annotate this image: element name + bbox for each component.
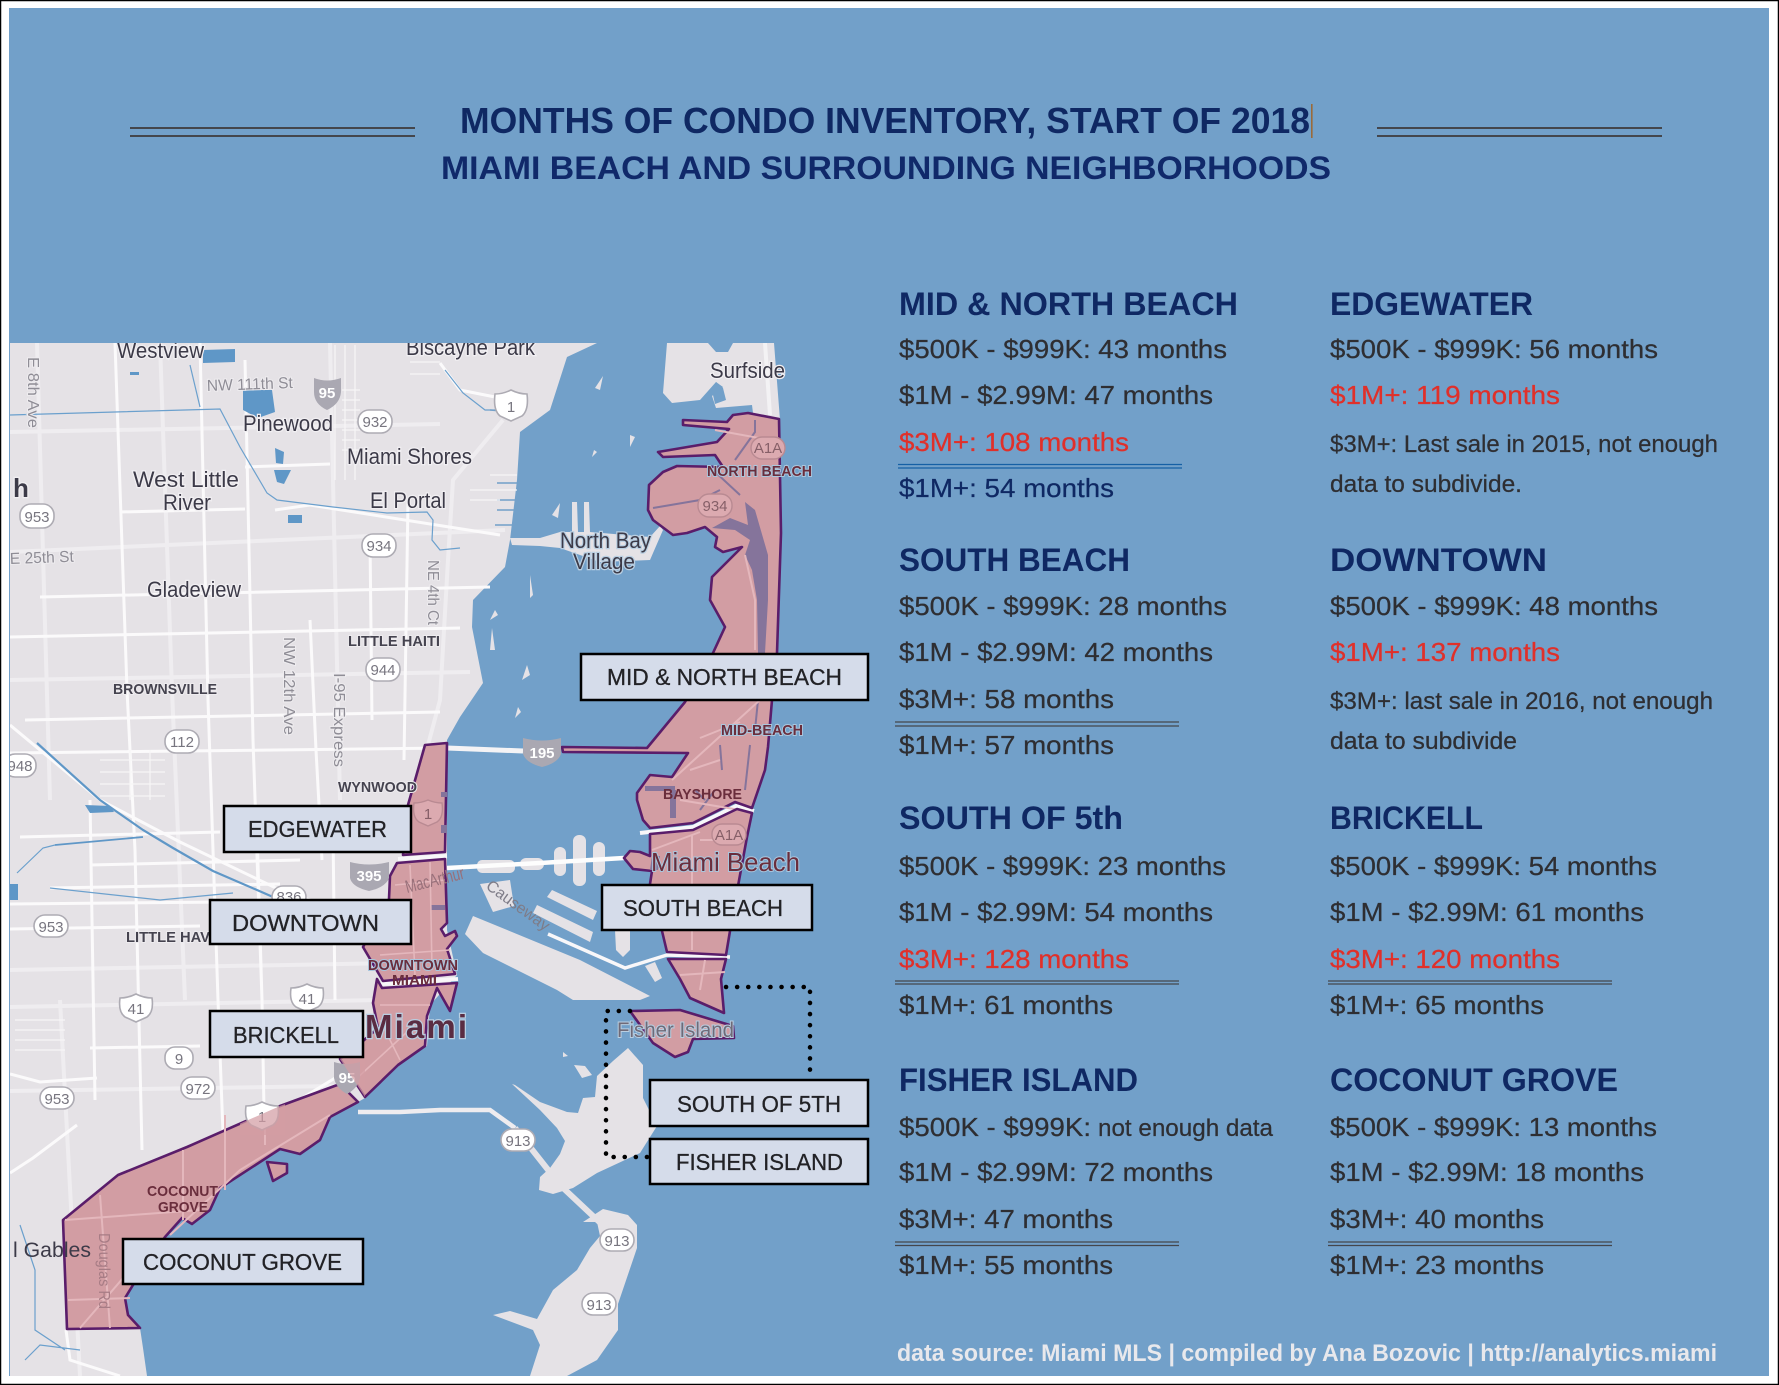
label: Edgewater <box>224 806 411 852</box>
panel: Downtown stats: DOWNTOWN <box>1330 542 1547 578</box>
Surfside island <box>663 343 780 420</box>
highway shields: A1A <box>715 827 743 844</box>
bay islets <box>490 376 635 718</box>
highway shields: 95 <box>319 385 335 402</box>
place names: NW 111th St <box>207 375 294 395</box>
highway shields: 41 <box>128 1001 144 1018</box>
highway shields: 836 <box>276 889 302 906</box>
causeway to Key Biscayne <box>514 1126 598 1224</box>
place names: Biscayne Park <box>406 335 536 360</box>
panel: Fisher Island stats: $1M - $2.99M: 72 months <box>899 1157 1213 1187</box>
panel: South of 5th stats: SOUTH OF 5th <box>899 800 1123 836</box>
panel: Brickell stats <box>1328 800 1657 1020</box>
label: South Beach <box>602 885 812 930</box>
Julia Tuttle causeway <box>447 748 523 751</box>
highway shields: 944 <box>370 662 396 679</box>
place names: E 8th Ave <box>24 357 41 428</box>
footer source line: data source: Miami MLS | compiled by Ana Bozovic | http://analytics.miami <box>897 1340 1717 1367</box>
label: Mid and North Beach: MID & NORTH BEACH <box>607 664 842 690</box>
highway shields: 948 <box>7 758 33 775</box>
highway shields: 395 <box>356 868 382 885</box>
place names: Fisher Island <box>617 1019 734 1042</box>
pink region: Mid and North Beach <box>562 413 781 828</box>
dotted leader: South of 5th <box>726 987 810 1080</box>
panel: Edgewater stats: $500K - $999K: 56 months <box>1330 334 1658 364</box>
panel: Mid and North Beach stats: $1M+: 54 months <box>899 473 1114 503</box>
panel: Downtown stats: data to subdivide <box>1330 728 1517 755</box>
highway shields: 932 <box>362 414 388 431</box>
place names: NW 12th Ave <box>280 637 297 735</box>
right double rule <box>1377 128 1662 136</box>
panel: Coconut Grove stats: COCONUT GROVE <box>1330 1062 1618 1098</box>
pink region: South Beach <box>624 809 752 955</box>
panel: Coconut Grove stats <box>1328 1062 1657 1280</box>
panel: South of 5th stats <box>895 800 1226 1020</box>
panel: Downtown stats: $500K - $999K: 48 months <box>1330 591 1658 621</box>
place names: Miami Beach <box>651 847 800 877</box>
Virginia Key <box>512 1048 657 1194</box>
place names: E 25th St <box>10 549 75 568</box>
place names: DOWNTOWN <box>368 957 458 974</box>
highway shields: 1 <box>258 1109 266 1126</box>
label: South of 5th: SOUTH OF 5TH <box>677 1091 841 1117</box>
panel: Fisher Island stats: FISHER ISLAND <box>899 1062 1138 1098</box>
panel: Coconut Grove stats: $1M+: 23 months <box>1330 1250 1544 1280</box>
place names: NORTH BEACH <box>707 463 812 480</box>
map <box>4 335 868 1376</box>
panel: Brickell stats: $3M+: 120 months <box>1330 944 1560 974</box>
label: South Beach: SOUTH BEACH <box>623 895 783 921</box>
panel: Coconut Grove stats: $1M - $2.99M: 18 months <box>1330 1157 1644 1187</box>
dotted leader: Fisher Island <box>606 1011 648 1157</box>
panel: Edgewater stats: $1M+: 119 months <box>1330 380 1560 410</box>
panel: Edgewater stats: $3M+: Last sale in 2015, not enough <box>1330 431 1718 458</box>
highway shields: 934 <box>366 538 392 555</box>
canals and ponds <box>10 349 517 1360</box>
beach separator roads <box>380 806 754 984</box>
inland waterways <box>712 502 768 653</box>
place names: River <box>163 490 211 515</box>
label: Downtown <box>210 900 411 944</box>
pink region: South of 5th <box>668 959 726 1013</box>
Venetian causeway and islands <box>477 835 630 957</box>
panel: South Beach stats <box>895 542 1227 760</box>
highway shields: 1 <box>507 399 515 416</box>
label: Edgewater: EDGEWATER <box>248 816 387 842</box>
north bay village <box>510 502 663 562</box>
panel: Downtown stats: $1M+: 137 months <box>1330 637 1560 667</box>
inlet <box>708 343 733 404</box>
label: Fisher Island: FISHER ISLAND <box>676 1149 843 1175</box>
label: Brickell: BRICKELL <box>233 1022 339 1048</box>
Key Biscayne <box>493 1209 637 1376</box>
place names: Westview <box>117 338 204 363</box>
secondary roads <box>10 343 505 1376</box>
place names: GROVE <box>158 1199 208 1216</box>
pink region: Fisher Island <box>630 1010 734 1057</box>
place names: NE 4th Ct <box>424 560 441 626</box>
panel: Fisher Island stats: not enough data <box>1098 1115 1274 1142</box>
label: Downtown: DOWNTOWN <box>232 910 379 936</box>
main roads <box>10 343 500 1376</box>
panel: Coconut Grove stats: $500K - $999K: 13 months <box>1330 1112 1657 1142</box>
panel: Mid and North Beach stats <box>898 286 1238 503</box>
place names: COCONUT <box>147 1183 218 1200</box>
label: Coconut Grove <box>123 1239 363 1284</box>
place names: West Little <box>133 467 239 492</box>
Dodge Island <box>465 916 650 1000</box>
place names: Pinewood <box>243 411 333 436</box>
mainland <box>10 343 597 1376</box>
panel: South Beach stats: SOUTH BEACH <box>899 542 1130 578</box>
highway shields: A1A <box>754 440 782 457</box>
panel: Fisher Island stats: $1M+: 55 months <box>899 1250 1113 1280</box>
panel: Mid and North Beach stats: MID & NORTH BEACH <box>899 286 1238 322</box>
panel: South of 5th stats: $1M - $2.99M: 54 months <box>899 897 1213 927</box>
left double rule <box>130 128 415 136</box>
label: Coconut Grove: COCONUT GROVE <box>143 1249 342 1275</box>
highway shields: 934 <box>702 498 728 515</box>
place names: Douglas Rd <box>95 1233 112 1309</box>
panel: Edgewater stats: data to subdivide. <box>1330 471 1522 498</box>
place names: LITTLE HAV <box>126 929 210 946</box>
pink region: Coconut Grove <box>63 1084 358 1329</box>
panel: Downtown stats <box>1330 542 1713 755</box>
place names: Causeway <box>483 877 553 935</box>
highway shields: 95 <box>339 1070 355 1087</box>
place names: l Gables <box>13 1239 91 1262</box>
place names: Gladeview <box>147 577 241 602</box>
place names: WYNWOOD <box>338 779 417 796</box>
place names: Miami <box>365 1008 467 1045</box>
highway shields: 953 <box>24 509 50 526</box>
place names: LITTLE HAITI <box>348 633 440 650</box>
label: South of 5th <box>650 1080 868 1126</box>
label: Brickell <box>210 1011 363 1057</box>
panel: South Beach stats: $3M+: 58 months <box>899 684 1114 714</box>
place names: Miami Shores <box>347 444 472 469</box>
place names: MID-BEACH <box>721 722 803 739</box>
place names <box>10 335 812 1309</box>
place names: BAYSHORE <box>663 786 742 803</box>
highway shields: 972 <box>185 1081 211 1098</box>
highway shields: 913 <box>604 1233 630 1250</box>
highway shields: 41 <box>299 991 315 1008</box>
place names: El Portal <box>370 488 446 513</box>
panel: Edgewater stats: EDGEWATER <box>1330 286 1533 322</box>
panel: Brickell stats: $1M - $2.99M: 61 months <box>1330 897 1644 927</box>
panel: Fisher Island stats: $3M+: 47 months <box>899 1204 1113 1234</box>
place names: MacArthur <box>403 863 466 897</box>
panel: Edgewater stats <box>1330 286 1718 498</box>
panel: South Beach stats: $1M+: 57 months <box>899 730 1114 760</box>
highway shields: 9 <box>175 1051 183 1068</box>
text caret <box>1311 104 1313 138</box>
pink region: Downtown <box>363 859 457 981</box>
panel: Brickell stats: $500K - $999K: 54 months <box>1330 851 1657 881</box>
place names: h <box>13 473 29 503</box>
label: Fisher Island <box>650 1139 868 1184</box>
panel: Mid and North Beach stats: $1M - $2.99M: 47 months <box>899 380 1213 410</box>
highway shields: 953 <box>44 1091 70 1108</box>
title block <box>441 100 1331 186</box>
panel: South of 5th stats: $500K - $999K: 23 months <box>899 851 1226 881</box>
place names: BROWNSVILLE <box>113 681 217 698</box>
place names: I-95 Express <box>330 673 347 767</box>
place names: MIAMI <box>392 972 437 989</box>
dense street blocks <box>15 345 517 1050</box>
highway shields: 112 <box>170 734 194 751</box>
highway shields <box>4 378 785 1315</box>
panel: Coconut Grove stats: $3M+: 40 months <box>1330 1204 1544 1234</box>
panel: South Beach stats: $1M - $2.99M: 42 months <box>899 637 1213 667</box>
port causeway <box>548 934 730 968</box>
MacArthur causeway <box>447 858 624 868</box>
panel: Fisher Island stats <box>895 1062 1274 1280</box>
highway shields: 913 <box>505 1133 531 1150</box>
panel: Fisher Island stats: $500K - $999K: <box>899 1112 1091 1142</box>
panel: Mid and North Beach stats: $500K - $999K: 43 months <box>899 334 1227 364</box>
title line 2: MIAMI BEACH AND SURROUNDING NEIGHBORHOODS <box>441 150 1331 186</box>
place names: Surfside <box>710 358 785 383</box>
panel: Brickell stats: BRICKELL <box>1330 800 1483 836</box>
panel: Brickell stats: $1M+: 65 months <box>1330 990 1544 1020</box>
place names: Village <box>573 549 635 574</box>
panel: South Beach stats: $500K - $999K: 28 months <box>899 591 1227 621</box>
title line 1: MONTHS OF CONDO INVENTORY, START OF 2018 <box>460 100 1310 141</box>
pink region: Edgewater <box>403 743 447 855</box>
label: Mid and North Beach <box>581 654 868 700</box>
highway shields: 195 <box>529 745 555 762</box>
panel: South of 5th stats: $3M+: 128 months <box>899 944 1129 974</box>
streets inside <box>672 430 770 810</box>
highway shields: 913 <box>586 1297 612 1314</box>
Rickenbacker causeway <box>358 1110 515 1128</box>
place names: North Bay <box>560 528 651 553</box>
highway shields: 1 <box>424 806 432 823</box>
panel: Downtown stats: $3M+: last sale in 2016, not enough <box>1330 688 1713 715</box>
panel: Mid and North Beach stats: $3M+: 108 months <box>899 427 1129 457</box>
Surfside road <box>765 343 770 415</box>
highway shields: 953 <box>38 919 64 936</box>
panel: South of 5th stats: $1M+: 61 months <box>899 990 1113 1020</box>
pink region: Brickell <box>340 979 457 1097</box>
